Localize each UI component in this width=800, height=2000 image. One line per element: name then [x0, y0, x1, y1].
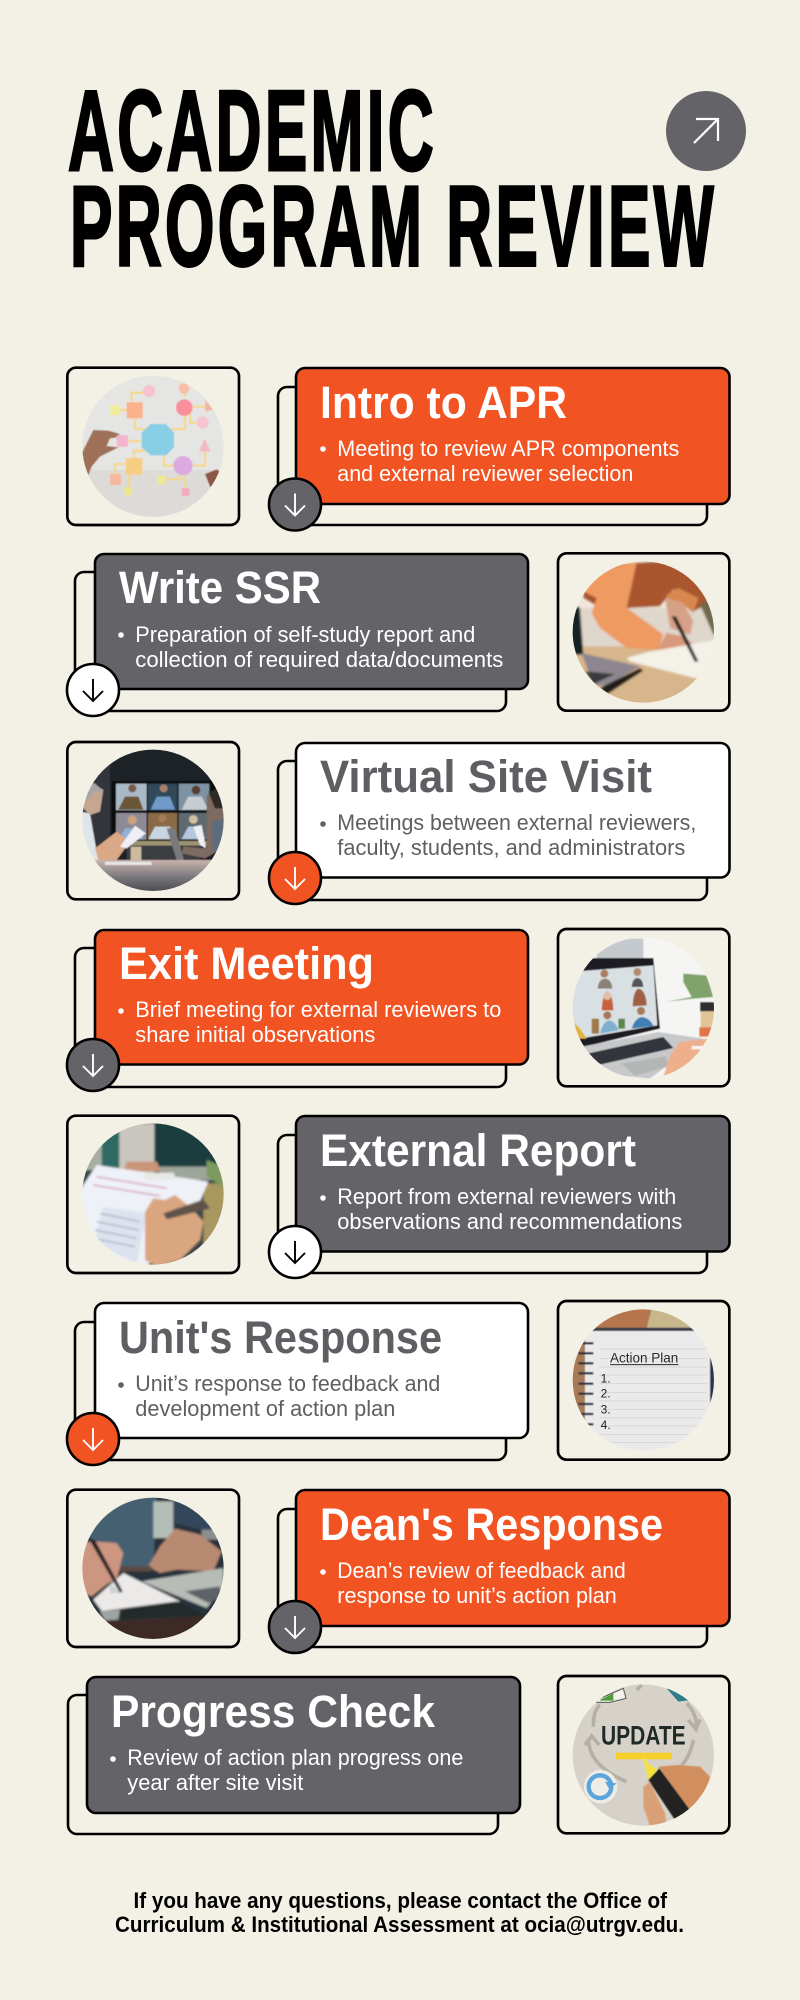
icon: diagonal arrow badge [666, 91, 746, 171]
description: Brief meeting for external reviewers to [135, 997, 501, 1022]
icon: down arrow [67, 1413, 119, 1465]
step 8: Progress Check [68, 1676, 729, 1834]
photo: video conference room [67, 742, 239, 899]
description: Meeting to review APR components [337, 436, 679, 461]
photo: update highlight: UPDATE [601, 1720, 686, 1750]
description [320, 1558, 626, 1608]
card: Dean's Response [296, 1490, 730, 1626]
card background outline [75, 948, 506, 1087]
icon: down arrow [269, 852, 321, 904]
photo: action plan notebook: 1. [601, 1371, 611, 1385]
card background outline [75, 572, 506, 711]
photo: action plan notebook: 3. [601, 1402, 611, 1416]
heading: External Report [320, 1125, 636, 1176]
card background outline [75, 1322, 506, 1460]
heading: Unit's Response [119, 1312, 442, 1363]
heading: Virtual Site Visit [320, 751, 652, 802]
heading: Write SSR [119, 562, 321, 613]
description: faculty, students, and administrators [337, 835, 685, 860]
description [118, 622, 503, 672]
description: share initial observations [135, 1022, 375, 1047]
step 5: External Report [67, 1116, 730, 1278]
title [68, 68, 717, 290]
title: ACADEMIC [68, 68, 437, 195]
card: External Report [296, 1116, 730, 1252]
description [320, 1184, 682, 1234]
description: development of action plan [135, 1396, 395, 1421]
step 6: Unit's Response [67, 1301, 729, 1465]
description: Preparation of self-study report and [135, 622, 475, 647]
step 4: Exit Meeting [67, 929, 729, 1091]
description: collection of required data/documents [135, 647, 503, 672]
description [320, 436, 679, 486]
step 7: Dean's Response [67, 1490, 730, 1653]
card: Progress Check [87, 1677, 520, 1813]
step 3: Virtual Site Visit [67, 742, 730, 904]
photo: signing document [67, 1490, 239, 1647]
photo: update highlight [558, 1676, 729, 1833]
description [110, 1745, 463, 1795]
card background outline [278, 1509, 707, 1647]
step 2: Write SSR [67, 553, 729, 716]
description: Dean’s review of feedback and [337, 1558, 626, 1583]
description [118, 997, 501, 1047]
footer contact note: If you have any questions, please contact the Office of [134, 1888, 668, 1913]
card background outline [278, 761, 707, 900]
card: Virtual Site Visit [296, 743, 730, 878]
description: observations and recommendations [337, 1209, 682, 1234]
photo: laptop video call [558, 929, 729, 1086]
description: Meetings between external reviewers, [337, 810, 696, 835]
photo: action plan notebook: 2. [601, 1386, 611, 1400]
heading: Progress Check [111, 1686, 436, 1737]
icon: down arrow [269, 478, 321, 530]
heading: Dean's Response [320, 1499, 663, 1550]
heading: Exit Meeting [119, 938, 374, 989]
card background outline [278, 1135, 707, 1273]
icon: down arrow [269, 1601, 321, 1653]
description [320, 810, 696, 860]
footer contact note: Curriculum & Institutional Assessment at ocia@utrgv.edu. [115, 1912, 684, 1937]
description: Review of action plan progress one [127, 1745, 463, 1770]
photo: flowchart shapes [67, 368, 239, 525]
description: and external reviewer selection [337, 461, 633, 486]
step 1: Intro to APR [67, 368, 730, 530]
card background outline [278, 387, 707, 525]
card: Exit Meeting [95, 930, 528, 1064]
photo: action plan notebook: Action Plan [610, 1350, 678, 1366]
card background outline [68, 1695, 498, 1834]
description [118, 1371, 440, 1421]
card: Unit's Response [95, 1303, 528, 1438]
description: year after site visit [127, 1770, 304, 1795]
card: Intro to APR [296, 368, 730, 504]
description: response to unit’s action plan [337, 1583, 617, 1608]
icon: down arrow [67, 1039, 119, 1091]
heading: Intro to APR [320, 377, 567, 428]
description: Unit’s response to feedback and [135, 1371, 440, 1396]
icon: down arrow [67, 664, 119, 716]
description: Report from external reviewers with [337, 1184, 676, 1209]
photo: action plan notebook: 4. [601, 1418, 611, 1432]
card: Write SSR [95, 554, 528, 689]
footer contact note [115, 1888, 684, 1937]
photo: action plan notebook [558, 1301, 729, 1460]
photo: hand filling clipboard form [67, 1116, 239, 1273]
icon: down arrow [269, 1226, 321, 1278]
photo: writing at desk [558, 553, 729, 711]
